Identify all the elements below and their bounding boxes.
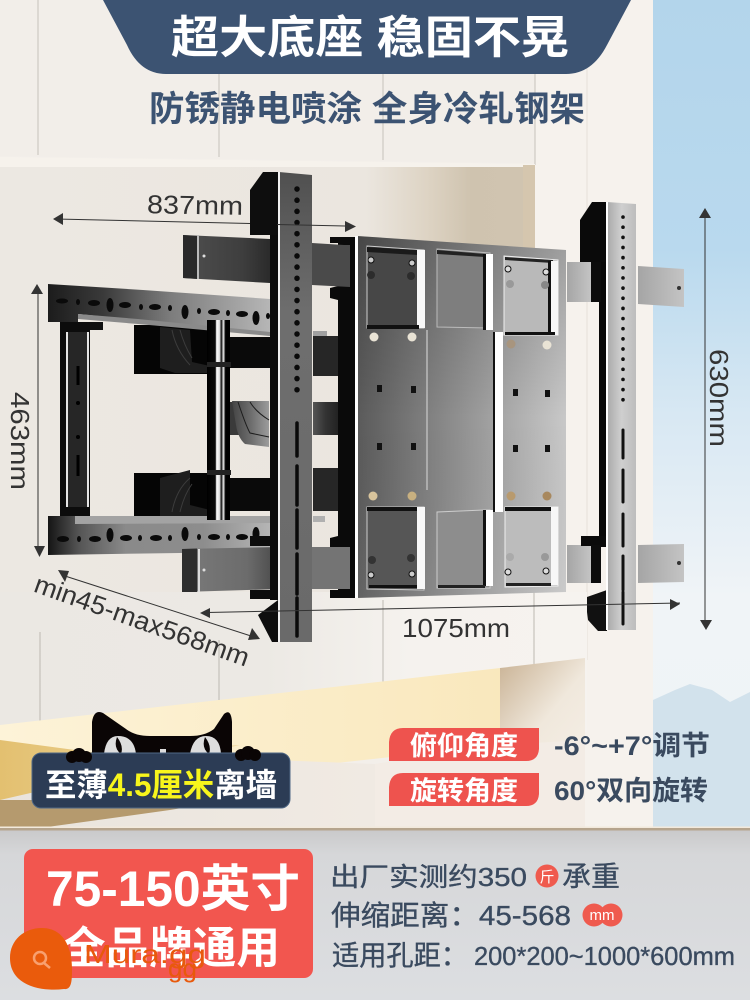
- spec: load: 承重: [562, 861, 620, 892]
- dimension: 837mm: [53, 189, 356, 232]
- red size box: [24, 849, 313, 978]
- right vertical strip: [567, 202, 684, 631]
- centre pole: [207, 320, 231, 520]
- top title banner: [103, 0, 631, 74]
- dimension: 630mm: [699, 208, 734, 630]
- bottom grey band: [0, 826, 750, 1000]
- lower right cutout: [505, 507, 558, 587]
- tilt badge: [389, 728, 539, 761]
- central divider: [494, 332, 503, 512]
- dimension: 463mm: 463mm: [5, 392, 35, 490]
- red size box: 75-150英寸: [46, 861, 300, 917]
- upper right cutout: [504, 256, 558, 335]
- lower left cutout: [367, 507, 425, 590]
- mm badge: mm: [590, 907, 614, 924]
- wall mount bracket: [48, 172, 684, 642]
- watermark: Mura.gg: [84, 939, 206, 969]
- cat paws: [66, 746, 261, 763]
- red size box: 全品牌通用: [62, 924, 280, 973]
- title: 超大底座 稳固不晃: [171, 12, 569, 63]
- spec: extension: 伸缩距离：45-568: [331, 900, 571, 931]
- spec: load: 出厂实测约350: [330, 862, 527, 892]
- dimension: min45-max568mm: min45-max568mm: [30, 569, 254, 672]
- top rail: [48, 284, 270, 336]
- rotation value: 60°双向旋转: [554, 776, 708, 806]
- small square holes: [377, 385, 550, 452]
- dimension: 463mm: [5, 284, 45, 557]
- 斤 badge: 斤: [539, 869, 555, 886]
- keyholes: [368, 332, 552, 500]
- dimension: 630mm: 630mm: [704, 349, 734, 447]
- watermark: [10, 928, 206, 990]
- bottom rail: [48, 516, 270, 555]
- cat mascot: [92, 712, 232, 765]
- left vertical strip: [250, 172, 312, 642]
- dimension: 1075mm: [200, 599, 680, 643]
- rotation badge: [389, 773, 539, 806]
- arm blocks: [134, 325, 270, 516]
- upper middle cutout: [437, 249, 493, 330]
- lower middle cutout: [437, 510, 493, 588]
- watermark: gg: [168, 953, 197, 983]
- subtitle: 防锈静电喷涂 全身冷轧钢架: [149, 90, 585, 129]
- upper left cutout: [367, 246, 425, 329]
- slogan text: 至薄4.5厘米离墙: [45, 767, 277, 803]
- spec: load: [330, 861, 620, 892]
- rotation badge: 旋转角度: [410, 776, 518, 806]
- spec: hole spacing: 适用孔距：: [332, 940, 468, 971]
- right arm pieces behind plate: [313, 331, 338, 522]
- dimension: 1075mm: 1075mm: [402, 613, 510, 643]
- top left tab: [183, 235, 350, 287]
- spec: hole spacing: 200*200~1000*600mm: [474, 941, 735, 971]
- dimension: 837mm: 837mm: [147, 189, 243, 221]
- 斤 badge: [536, 864, 558, 888]
- spec: hole spacing: [332, 940, 735, 971]
- mm badge: [582, 904, 622, 926]
- wall plate left upright: [60, 322, 103, 518]
- slogan plate: [32, 746, 290, 808]
- central VESA plate: [330, 236, 566, 598]
- bottom left tab: [182, 536, 350, 599]
- tilt badge: 俯仰角度: [410, 731, 518, 761]
- tilt value: -6°~+7°调节: [554, 731, 710, 761]
